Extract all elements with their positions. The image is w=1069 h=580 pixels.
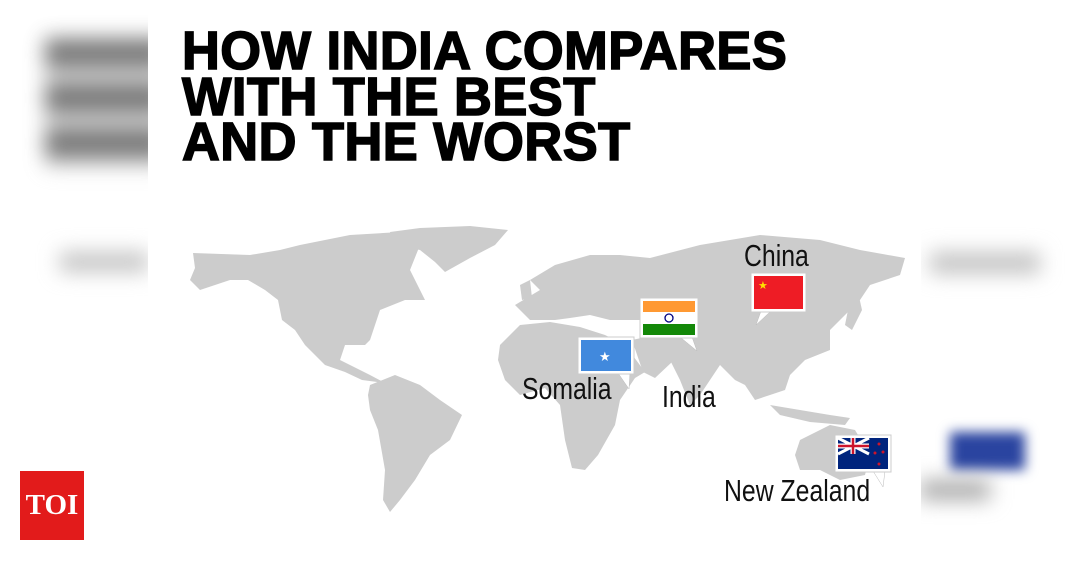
UK bbox=[520, 280, 532, 300]
Greenland bbox=[390, 226, 508, 272]
title: WITH THE BEST bbox=[182, 66, 596, 126]
Arabia bbox=[632, 335, 672, 378]
flag: Somalia: ★ bbox=[599, 349, 611, 364]
label: New Zealand: New Zealand bbox=[724, 473, 870, 508]
blurred background: left title bbox=[45, 38, 165, 168]
blurred background: right flag bbox=[950, 432, 1025, 470]
flag: India bbox=[640, 298, 698, 351]
Eurasia bbox=[515, 235, 905, 405]
Africa bbox=[498, 322, 645, 470]
Japan bbox=[845, 292, 862, 330]
South America bbox=[368, 375, 462, 512]
Indonesia bbox=[770, 405, 850, 425]
logo: TOI bbox=[20, 471, 84, 540]
label: India: India bbox=[662, 379, 716, 414]
Australia bbox=[795, 425, 870, 480]
North America bbox=[190, 232, 425, 383]
title: AND THE WORST bbox=[182, 112, 631, 172]
label: Somalia: Somalia bbox=[522, 371, 612, 406]
label: China: China bbox=[744, 238, 809, 273]
blurred background: right map bbox=[930, 252, 1040, 274]
flag: Somalia bbox=[578, 336, 634, 389]
central panel bbox=[148, 0, 921, 580]
flag: China bbox=[752, 274, 806, 325]
logo: TOI: TOI bbox=[26, 489, 78, 521]
title bbox=[181, 21, 787, 172]
title: HOW INDIA COMPARES bbox=[182, 21, 787, 81]
flag: China: ★ bbox=[758, 280, 768, 292]
flag: New Zealand bbox=[836, 434, 892, 487]
